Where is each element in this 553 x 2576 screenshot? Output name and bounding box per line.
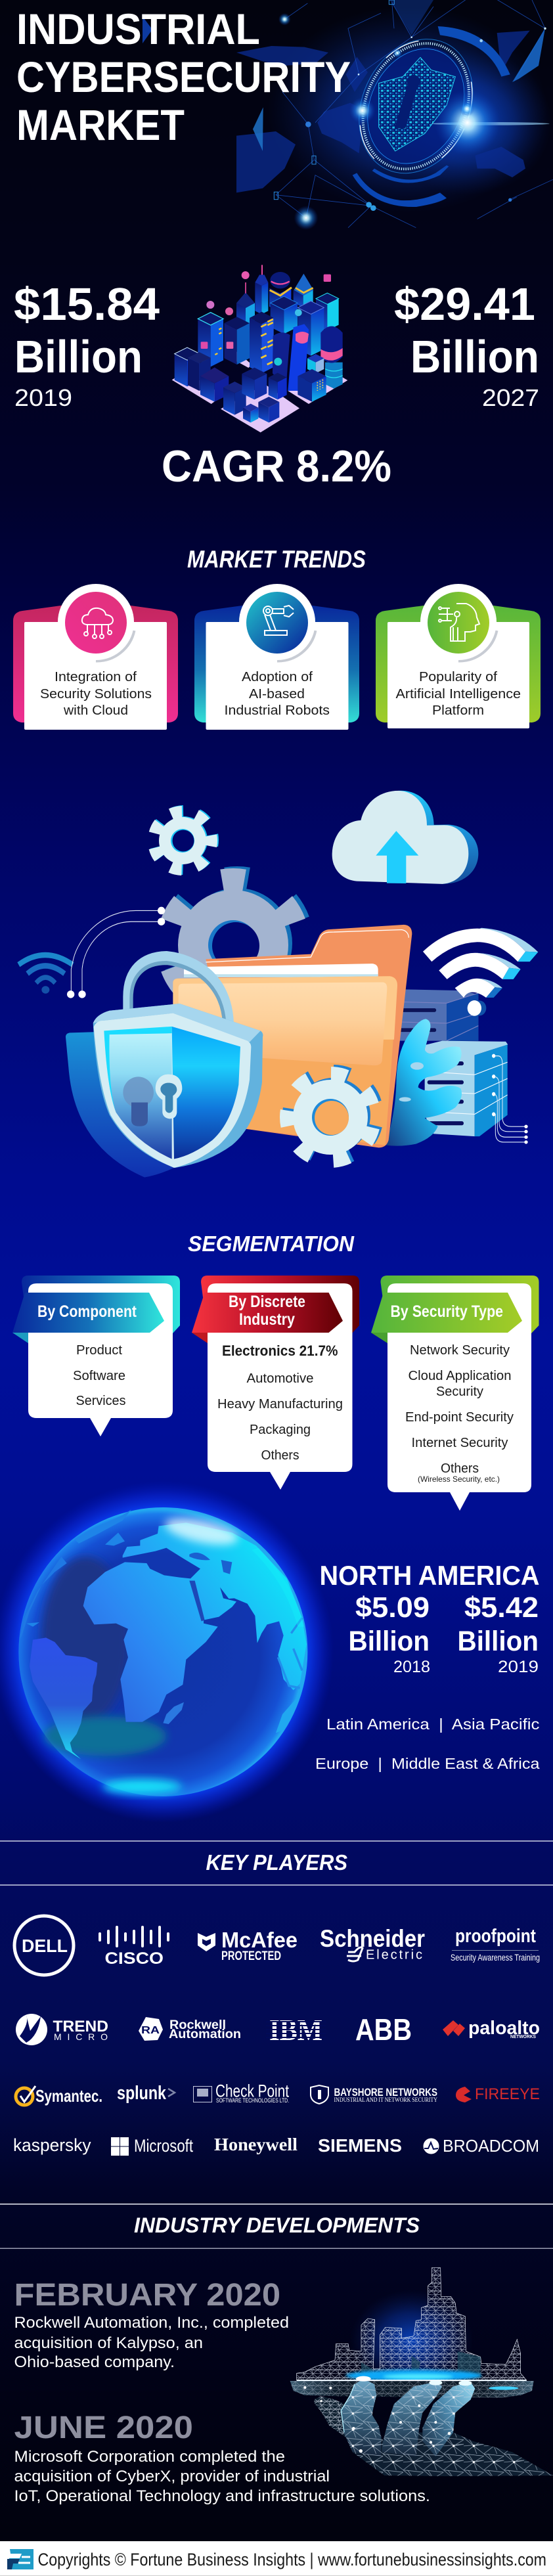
logo: Trend Micro: TREND	[53, 2018, 108, 2035]
logo: Check Point	[193, 2081, 289, 2104]
location badges	[201, 271, 331, 349]
panel: trend - cloud integration: Security Solutions	[40, 687, 152, 701]
logo: Trend Micro: MICRO	[54, 2032, 108, 2042]
development: February 2020: FEBRUARY 2020	[14, 2278, 280, 2313]
illustration: polygon hand holding wireframe city	[290, 2268, 553, 2476]
other regions list: Latin America | Asia Pacific	[326, 1716, 540, 1733]
icon: cloud circuit	[82, 608, 113, 638]
ribbon label: By Security Type	[390, 1302, 503, 1321]
icon: glowing globe	[0, 1481, 334, 1823]
icon: blue plant	[386, 1019, 462, 1146]
stat: 2027 market value: 2027	[482, 384, 539, 411]
logo: Rockwell Automation: RA	[141, 2025, 160, 2036]
logo: Schneider Electric	[320, 1925, 425, 1963]
cylinders and curved towers	[273, 324, 343, 391]
ribbon label: Industry	[239, 1310, 295, 1329]
icon: AI head	[439, 604, 479, 641]
icon: servers	[399, 989, 528, 1144]
logo: Splunk: splunk	[117, 2083, 167, 2104]
back row towers	[236, 265, 339, 330]
list items: Automotive	[247, 1371, 314, 1386]
list items: Others	[441, 1461, 479, 1476]
panel: trend - AI robots: Adoption of	[242, 670, 313, 684]
illustration: cybersecurity lock, folder, gears and servers	[18, 791, 538, 1177]
logo: Rockwell Automation: Automation	[169, 2028, 241, 2041]
list items: (Wireless Security, etc.)	[418, 1475, 500, 1484]
development: February 2020: acquisition of Kalypso, an	[14, 2334, 203, 2352]
regional stats: North America: $5.09	[355, 1591, 430, 1624]
logo: Bayshore Networks: INDUSTRIAL AND IT NETWORK SECURITY	[334, 2097, 437, 2103]
logo: Microsoft	[111, 2136, 193, 2156]
logo: McAfee: PROTECTED	[221, 1949, 281, 1963]
logo: Siemens: SIEMENS	[318, 2135, 402, 2156]
logo: Proofpoint	[451, 1926, 540, 1963]
regional stats: North America	[319, 1560, 540, 1676]
list items	[405, 1343, 514, 1484]
logo: Symantec	[16, 2086, 102, 2106]
regional stats: North America: NORTH AMERICA	[319, 1560, 540, 1591]
logo: Rockwell Automation: Rockwell	[169, 2018, 226, 2032]
list items: Internet Security	[411, 1436, 508, 1450]
panel: trend - cloud integration: with Cloud	[63, 703, 128, 718]
icon: lower gear	[287, 1072, 376, 1161]
list items: Packaging	[250, 1423, 311, 1437]
logo: Check Point: SOFTWARE TECHNOLOGIES LTD.	[216, 2097, 289, 2104]
development: June 2020: acquisition of CyberX, provider of industrial	[14, 2468, 330, 2485]
development: February 2020	[14, 2278, 289, 2371]
wireframe city	[297, 2268, 527, 2381]
icon: right wifi signal	[423, 928, 538, 1016]
footer band	[0, 2541, 553, 2576]
list items: End-point Security	[405, 1410, 514, 1425]
ribbon label: By Component	[37, 1302, 137, 1321]
logo: Palo Alto Networks: NETWORKS	[510, 2035, 536, 2039]
stat: 2019 market value: 2019	[14, 384, 72, 411]
panel: trend - AI robots: AI-based	[249, 687, 305, 701]
list items: Services	[76, 1394, 126, 1408]
development: June 2020: IoT, Operational Technology and infrastructure solutions.	[14, 2487, 430, 2505]
panel: trend - cloud integration	[13, 584, 178, 730]
list items: Heavy Manufacturing	[217, 1397, 343, 1411]
title: MARKET	[16, 100, 185, 149]
icon: shield padlock	[66, 956, 263, 1177]
tablet platform	[290, 2380, 534, 2398]
development: June 2020: JUNE 2020	[14, 2410, 193, 2445]
heading: segmentation: SEGMENTATION	[188, 1232, 355, 1256]
logo: Cisco: CISCO	[105, 1949, 164, 1968]
middle row towers	[198, 296, 324, 373]
panel: trend - artificial intelligence: Platform	[432, 703, 484, 718]
list items: Software	[73, 1369, 125, 1383]
continents	[20, 1507, 307, 1759]
list items	[217, 1343, 343, 1463]
logo: Palo Alto Networks: paloalto	[468, 2018, 540, 2039]
other regions list: Europe | Middle East & Africa	[315, 1755, 540, 1772]
icon: Fortune Business Insights logo	[7, 2549, 33, 2569]
logo: Rockwell Automation	[139, 2017, 241, 2041]
logo: FireEye: FIREEYE	[475, 2085, 540, 2103]
panel: segmentation by security type	[371, 1276, 539, 1511]
logo: ABB: ABB	[355, 2012, 412, 2047]
stat: 2027 market value: Billion	[410, 331, 539, 382]
logo: Kaspersky: kaspersky	[13, 2135, 91, 2155]
logo: IBM: IBM	[269, 2013, 322, 2047]
icon: robot arm	[263, 606, 294, 635]
list items	[73, 1343, 126, 1408]
panel: segmentation by component	[12, 1276, 180, 1436]
list items: Security	[436, 1385, 483, 1399]
heading band: industry developments: INDUSTRY DEVELOPMENTS	[134, 2213, 420, 2237]
logo: Trend Micro	[16, 2014, 108, 2045]
logo: McAfee: McAfee	[221, 1928, 298, 1952]
title	[16, 5, 351, 149]
panel: trend - artificial intelligence	[376, 584, 541, 728]
logo: Dell	[14, 1916, 74, 1975]
regional stats: North America: Billion	[348, 1626, 430, 1657]
icon: isometric smart city	[172, 265, 347, 432]
stat: 2019 market value: Billion	[14, 331, 143, 382]
ocean shading	[41, 1557, 182, 1794]
logo: Microsoft: Microsoft	[134, 2136, 193, 2156]
panel: trend - cloud integration: Integration of	[55, 670, 137, 684]
connector wires	[67, 907, 165, 998]
regional stats: North America: 2018	[393, 1658, 430, 1676]
list items: Product	[76, 1343, 122, 1358]
ribbon label	[229, 1293, 305, 1329]
logo: Schneider Electric: Schneider	[320, 1925, 425, 1952]
logo: Dell: DELL	[22, 1936, 68, 1956]
regional stats: North America: Billion	[457, 1626, 539, 1657]
development: February 2020: Rockwell Automation, Inc., completed	[14, 2314, 289, 2332]
logo: McAfee	[198, 1928, 298, 1963]
panel: trend - AI robots: Industrial Robots	[225, 703, 330, 718]
development: June 2020: Microsoft Corporation completed the	[14, 2448, 285, 2466]
regional stats: North America: $5.42	[464, 1591, 539, 1624]
icon: small gear	[154, 811, 213, 870]
list items: Others	[261, 1448, 299, 1463]
logo: Symantec: Symantec.	[35, 2086, 102, 2106]
fingers and palm	[303, 2376, 553, 2476]
logo: Bayshore Networks	[311, 2085, 437, 2104]
specular highlights	[163, 1513, 304, 1627]
logo: Proofpoint: proofpoint	[455, 1926, 536, 1947]
heading band: key players: KEY PLAYERS	[206, 1850, 347, 1875]
front row buildings	[175, 347, 326, 422]
panel: trend - artificial intelligence: Artificial Intelligence	[395, 687, 521, 701]
panel: trend - AI robots	[194, 584, 359, 730]
development: February 2020: Ohio-based company.	[14, 2353, 175, 2371]
logo: Honeywell: Honeywell	[214, 2135, 298, 2154]
title: CYBERSECURITY	[16, 53, 351, 101]
stat: 2019 market value	[14, 278, 160, 411]
stat: 2019 market value: $15.84	[14, 278, 160, 330]
panel: segmentation by discrete industry	[192, 1276, 359, 1490]
stat: 2027 market value: $29.41	[394, 278, 535, 330]
logo: Schneider Electric: Electric	[366, 1948, 422, 1963]
icon: left wifi signal	[18, 955, 73, 994]
logo: Cisco	[100, 1927, 168, 1968]
title: INDUSTRIAL	[16, 5, 260, 53]
logo: Check Point: Check Point	[215, 2081, 289, 2100]
logo: Broadcom: BROADCOM	[443, 2136, 539, 2156]
logo: Bayshore Networks: BAYSHORE NETWORKS	[334, 2086, 437, 2099]
ribbon label: By Discrete	[229, 1293, 305, 1311]
stat: CAGR: CAGR 8.2%	[162, 441, 391, 491]
heading: market trends: MARKET TRENDS	[187, 546, 366, 573]
icon: large grey gear	[167, 877, 303, 1011]
development: June 2020	[14, 2410, 430, 2505]
list items: Cloud Application	[409, 1369, 511, 1383]
icon: folder	[173, 925, 412, 1147]
other regions list	[315, 1716, 540, 1772]
panel: trend - artificial intelligence: Popularity of	[419, 670, 497, 684]
regional stats: North America: 2019	[498, 1658, 539, 1676]
stat: 2027 market value	[394, 278, 539, 411]
icon: upload cloud	[332, 791, 478, 884]
list items: Electronics 21.7%	[222, 1343, 338, 1359]
hero graphic: digital shield over world map	[236, 0, 553, 230]
list items: Network Security	[410, 1343, 510, 1358]
